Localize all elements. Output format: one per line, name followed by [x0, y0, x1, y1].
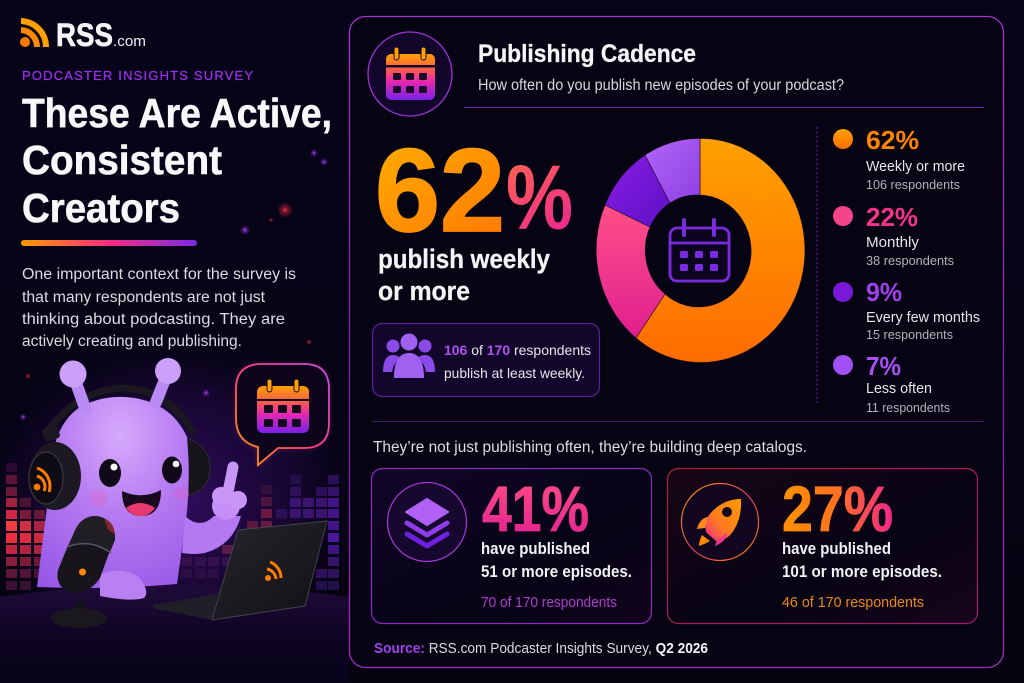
legend item: every few months [833, 277, 980, 342]
purple stage glow [0, 325, 375, 675]
respondents callout: 106 of 170 respondents [444, 342, 591, 358]
legend item: every few months: Every few months [866, 309, 980, 326]
legend item: weekly: Weekly or more [866, 158, 965, 175]
icon: rocket [682, 484, 758, 560]
legend [833, 125, 980, 415]
main title: Creators [22, 185, 180, 231]
card: 27%: have published [782, 539, 891, 558]
icon: people [383, 334, 435, 378]
equalizer bars left [6, 463, 45, 590]
header divider [464, 107, 984, 108]
legend item: weekly: 62% [866, 125, 919, 155]
eyes [99, 456, 182, 487]
catalogs sentence: They’re not just publishing often, they’re building deep catalogs. [373, 439, 807, 456]
legend item: every few months: 9% [866, 277, 902, 307]
resting hand [100, 571, 146, 600]
card: 41%: 41% [482, 473, 589, 545]
headline stat 62% [375, 125, 573, 257]
left ear cup [29, 425, 81, 510]
donut chart [596, 138, 805, 362]
right ear cup [184, 437, 210, 496]
gradient rule [21, 240, 197, 246]
legend item: monthly [833, 202, 954, 268]
eyebrow: PODCASTER INSIGHTS SURVEY [22, 68, 253, 83]
card: 41%: have published [481, 539, 590, 558]
arm and pointing hand [182, 467, 247, 554]
panel heading: Publishing Cadence [478, 40, 696, 68]
legend item: monthly: Monthly [866, 234, 919, 251]
legend item: every few months: 15 respondents [866, 327, 953, 342]
source line: Source: RSS.com Podcaster Insights Survey, Q2 2026 [374, 640, 708, 657]
microphone [51, 516, 115, 628]
speech bubble with calendar [236, 364, 329, 465]
sparkle stars [20, 149, 328, 420]
legend divider [816, 127, 818, 403]
icon: layers [388, 482, 466, 562]
table surface [0, 584, 349, 683]
header calendar badge [368, 32, 452, 116]
cheeks [88, 490, 108, 506]
panel question: How often do you publish new episodes of your podcast? [478, 77, 844, 94]
card: 27%: 27% [782, 473, 893, 545]
brand logo: RSS [56, 17, 113, 53]
card: 41% [372, 468, 652, 624]
main title: These Are Active, [22, 90, 332, 136]
legend item: weekly [833, 125, 965, 192]
equalizer bars right [181, 475, 339, 590]
body [37, 397, 189, 588]
headline stat caption [378, 244, 550, 306]
legend item: weekly: 106 respondents [866, 177, 960, 192]
headline stat caption: publish weekly [378, 244, 550, 274]
intro paragraph [22, 266, 296, 350]
respondents callout: publish at least weekly. [444, 365, 585, 381]
legend item: monthly: 38 respondents [866, 253, 954, 268]
headline stat 62%: % [506, 147, 573, 249]
intro paragraph: thinking about podcasting. They are [22, 311, 285, 328]
mascot [29, 358, 327, 628]
legend item: less often: 11 respondents [866, 400, 950, 415]
brand logo: .com [113, 33, 146, 50]
antennas [60, 358, 181, 408]
legend item: monthly: 22% [866, 202, 918, 232]
mid divider [372, 421, 984, 422]
respondents callout [372, 324, 600, 396]
icon: donut calendar [670, 220, 729, 281]
legend item: less often: 7% [866, 351, 901, 381]
legend item: less often: Less often [866, 380, 932, 397]
intro paragraph: One important context for the survey is [22, 266, 296, 283]
card: 27%: 46 of 170 respondents [782, 594, 924, 611]
legend item: less often [833, 351, 950, 415]
left column [0, 17, 375, 683]
main title: Consistent [22, 137, 222, 183]
card: 27% [668, 468, 978, 624]
intro paragraph: actively creating and publishing. [22, 333, 242, 350]
laptop [153, 521, 327, 620]
brand logo [20, 17, 146, 53]
headline stat 62%: 62 [375, 125, 505, 257]
main panel [350, 16, 1004, 668]
card: 41%: 51 or more episodes. [481, 562, 632, 581]
headline stat caption: or more [378, 276, 470, 306]
card: 27%: 101 or more episodes. [782, 562, 942, 581]
intro paragraph: that many respondents are not just [22, 289, 266, 306]
card: 41%: 70 of 170 respondents [481, 594, 617, 611]
main title [22, 90, 332, 231]
mouth [122, 490, 161, 516]
headband [47, 388, 194, 434]
